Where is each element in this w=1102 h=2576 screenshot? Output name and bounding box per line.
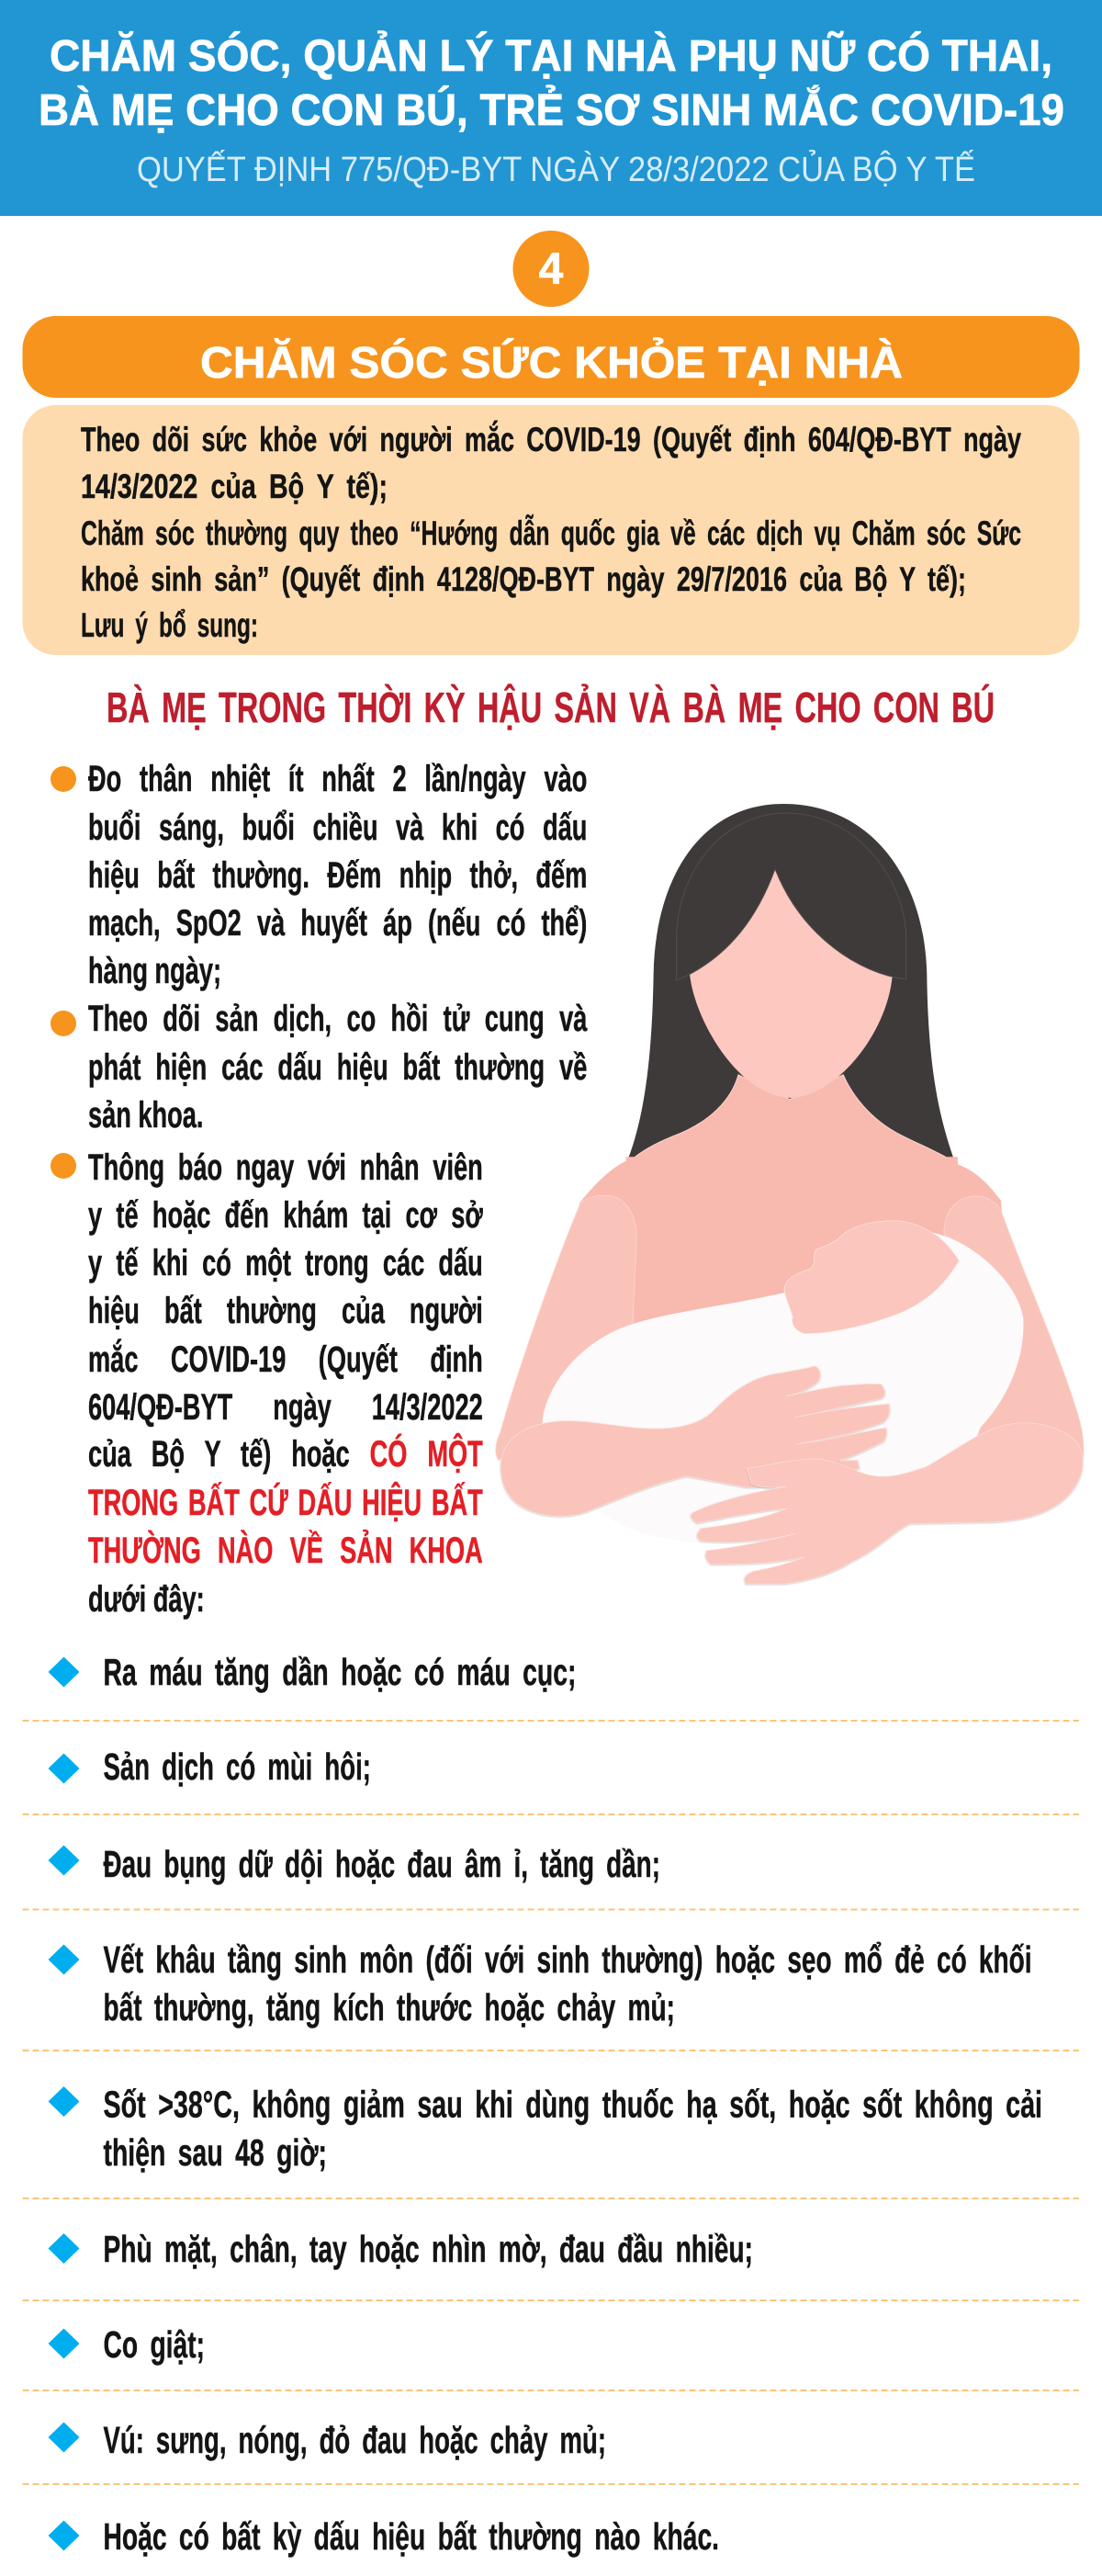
item: fever: [48, 2084, 1042, 2174]
number badge: [512, 231, 590, 307]
item: foul lochia: Sản dịch có mùi hôi;: [103, 1746, 371, 1788]
item: wound: bất thường, tăng kích thước hoặc chảy mủ;: [103, 1986, 675, 2028]
fringe: [677, 813, 906, 980]
item: swelling: Phù mặt, chân, tay hoặc nhìn mờ, đau đầu nhiều;: [103, 2228, 753, 2270]
title: [39, 30, 1064, 135]
right upper arm: [944, 1196, 1084, 1483]
bullet: temperature monitoring: [51, 759, 587, 991]
bullet: temperature monitoring: mạch, SpO2 và huyết áp (nếu có thể): [88, 903, 587, 943]
left upper arm: [496, 1195, 636, 1461]
item: abdominal pain: Đau bụng dữ dội hoặc đau âm ỉ, tăng dần;: [103, 1843, 660, 1885]
item: breast: [48, 2419, 606, 2461]
section heading pill: [22, 316, 1080, 398]
neck and upper chest: [631, 1075, 952, 1160]
illustration: mother breastfeeding baby: [496, 804, 1084, 1584]
item: wound: [48, 1938, 1032, 2028]
bullet: temperature monitoring: hàng ngày;: [88, 951, 221, 991]
face: [690, 866, 893, 1098]
bullet: notify medical staff: dưới đây:: [88, 1579, 205, 1620]
panel: home health guidance: Lưu ý bổ sung:: [81, 606, 258, 644]
bullet: notify medical staff: TRONG BẤT CỨ DẤU HIỆU BẤT: [88, 1483, 483, 1523]
title: CHĂM SÓC, QUẢN LÝ TẠI NHÀ PHỤ NỮ CÓ THAI,: [50, 30, 1052, 81]
bullet: lochia monitoring: sản khoa.: [88, 1095, 203, 1135]
bullet: temperature monitoring: Đo thân nhiệt ít nhất 2 lần/ngày vào: [88, 759, 587, 799]
mother head, hair and neck: [627, 804, 954, 1160]
item: other signs: [48, 2515, 719, 2558]
chest: [579, 1157, 1013, 1324]
item: bleeding: Ra máu tăng dần hoặc có máu cục;: [103, 1651, 577, 1693]
bullet: notify medical staff: y tế khi có một trong các dấu: [88, 1243, 483, 1283]
item: bleeding: [48, 1651, 577, 1693]
bullet: notify medical staff: THƯỜNG NÀO VỀ SẢN KHOA: [88, 1531, 483, 1571]
bullet: notify medical staff: Thông báo ngay với nhân viên: [88, 1147, 483, 1188]
item: foul lochia: [48, 1746, 371, 1788]
item: swelling: [48, 2228, 753, 2270]
item: other signs: Hoặc có bất kỳ dấu hiệu bất thường nào khác.: [103, 2515, 719, 2558]
right forearm and hand: [691, 1423, 1083, 1584]
list: warning signs: [22, 1651, 1079, 2558]
baby head: [784, 1221, 959, 1334]
item: abdominal pain: [48, 1843, 660, 1885]
subtitle: decision reference: QUYẾT ĐỊNH 775/QĐ-BYT NGÀY 28/3/2022 CỦA BỘ Y TẾ: [137, 149, 975, 189]
baby blanket: [543, 1232, 1023, 1542]
mother body and baby: [496, 1157, 1084, 1584]
bullet: lochia monitoring: [51, 999, 588, 1135]
item: fever: thiện sau 48 giờ;: [103, 2131, 327, 2174]
header banner: [0, 0, 1102, 216]
bullet: lochia monitoring: Theo dõi sản dịch, co hồi tử cung và: [88, 999, 587, 1039]
bullet: notify medical staff: 604/QĐ-BYT ngày 14/3/2022: [88, 1387, 483, 1428]
title: BÀ MẸ CHO CON BÚ, TRẺ SƠ SINH MẮC COVID-19: [39, 85, 1064, 135]
bullet: temperature monitoring: hiệu bất thường. Đếm nhịp thở, đếm: [88, 855, 587, 896]
panel: home health guidance: 14/3/2022 của Bộ Y tế);: [81, 468, 388, 505]
section heading pill: CHĂM SÓC SỨC KHỎE TẠI NHÀ: [200, 337, 903, 388]
item: breast: Vú: sưng, nóng, đỏ đau hoặc chảy mủ;: [103, 2419, 606, 2461]
hair: [627, 804, 954, 1160]
item: seizure: Co giật;: [103, 2323, 205, 2366]
bullet: lochia monitoring: phát hiện các dấu hiệu bất thường về: [88, 1047, 587, 1088]
bullet: notify medical staff: hiệu bất thường của người: [88, 1291, 483, 1331]
item: seizure: [48, 2323, 205, 2366]
bullet: notify medical staff: y tế hoặc đến khám tại cơ sở: [88, 1195, 483, 1236]
left forearm and hand: [500, 1366, 890, 1517]
number badge: 4: [539, 245, 564, 294]
panel: home health guidance: [22, 405, 1080, 655]
bullet: notify medical staff: mắc COVID-19 (Quyết định: [88, 1339, 483, 1380]
bullet: temperature monitoring: buổi sáng, buổi chiều và khi có dấu: [88, 808, 587, 848]
bullet: notify medical staff: [51, 1147, 483, 1620]
bullet: notify medical staff: của Bộ Y tế) hoặc CÓ MỘT: [88, 1434, 483, 1474]
